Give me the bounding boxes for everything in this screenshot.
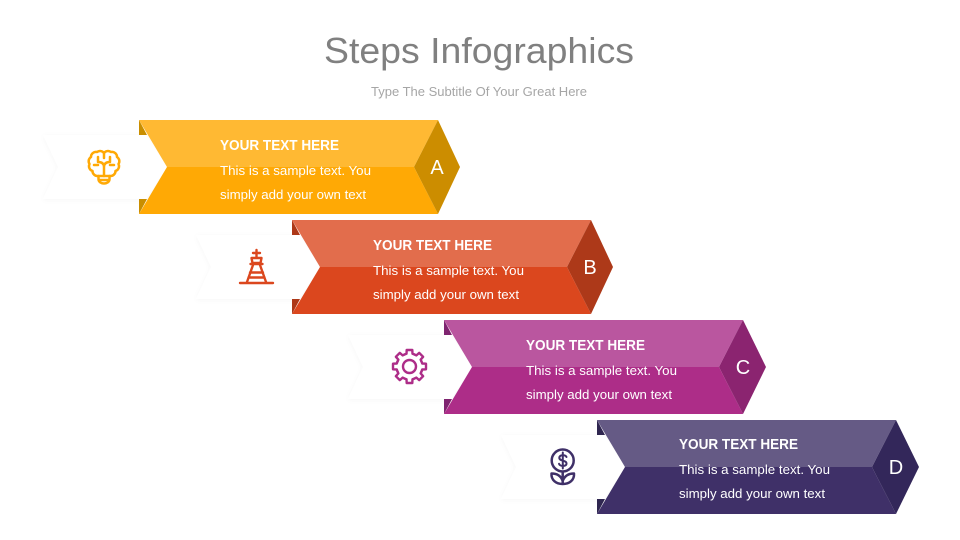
body text A: simply add your own text xyxy=(220,188,367,202)
icon: money plant xyxy=(551,450,574,484)
body text D: This is a sample text. You xyxy=(679,463,830,477)
panel: white chevron A xyxy=(43,135,167,199)
banner bottom D xyxy=(597,467,896,514)
letter A: A xyxy=(430,157,444,179)
body text C: simply add your own text xyxy=(526,388,673,402)
body text C xyxy=(526,364,677,402)
banner top C xyxy=(444,320,743,367)
panel: white chevron D xyxy=(501,435,625,499)
hexagon badge D xyxy=(872,420,919,514)
banner top A xyxy=(139,120,438,167)
banner corner folds A xyxy=(139,120,147,214)
heading C: YOUR TEXT HERE xyxy=(526,338,645,354)
hexagon badge A xyxy=(414,120,460,214)
icon: brain bulb xyxy=(89,151,119,184)
body text B: simply add your own text xyxy=(373,288,520,302)
body text C: This is a sample text. You xyxy=(526,364,677,378)
step C xyxy=(348,320,766,414)
banner bottom A xyxy=(139,167,438,214)
heading A: YOUR TEXT HERE xyxy=(220,138,339,154)
body text D: simply add your own text xyxy=(679,487,826,501)
banner bottom B xyxy=(292,267,591,314)
subtitle: Type The Subtitle Of Your Great Here xyxy=(371,84,587,99)
body text D xyxy=(679,463,830,501)
banner bottom C xyxy=(444,367,743,414)
letter C: C xyxy=(736,357,750,379)
hexagon badge C xyxy=(719,320,766,414)
step B xyxy=(196,220,613,314)
body text B xyxy=(373,264,524,302)
banner corner folds C xyxy=(444,320,452,414)
icon: gear xyxy=(393,350,426,383)
step A xyxy=(43,120,460,214)
panel: white chevron B xyxy=(196,235,320,299)
body text A xyxy=(220,164,371,202)
letter D: D xyxy=(889,457,903,479)
body text B: This is a sample text. You xyxy=(373,264,524,278)
step D xyxy=(501,420,919,514)
hexagon badge B xyxy=(567,220,613,314)
heading D: YOUR TEXT HERE xyxy=(679,437,798,453)
title: Steps Infographics xyxy=(324,30,634,71)
icon: chess king xyxy=(240,250,273,283)
banner corner folds B xyxy=(292,220,300,314)
banner top B xyxy=(292,220,591,267)
body text A: This is a sample text. You xyxy=(220,164,371,178)
letter B: B xyxy=(583,257,597,279)
panel: white chevron C xyxy=(348,335,472,399)
banner top D xyxy=(597,420,896,467)
banner corner folds D xyxy=(597,420,605,514)
heading B: YOUR TEXT HERE xyxy=(373,238,492,254)
